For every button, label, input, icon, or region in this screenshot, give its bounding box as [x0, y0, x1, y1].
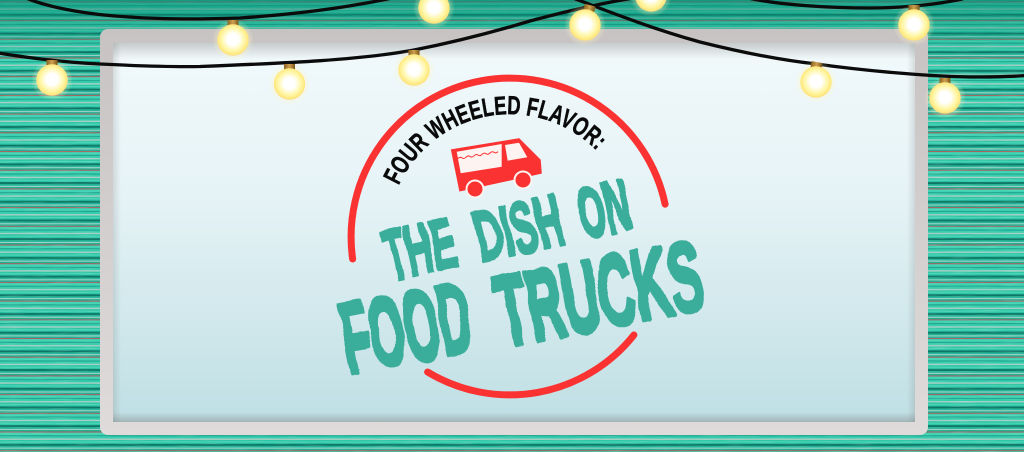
title: The Dish On: ON — [569, 165, 638, 255]
string light wires — [0, 0, 1024, 77]
ring: lower red arc — [428, 335, 634, 395]
curved subtitle: FOUR WHEELED FLAVOR: — [382, 96, 605, 185]
ring: upper red arc — [351, 78, 665, 259]
title: The Dish On: DISH — [467, 180, 570, 278]
window glass — [113, 43, 915, 422]
title: Food Trucks: FOOD — [332, 261, 481, 396]
window frame — [100, 29, 928, 435]
title: Food Trucks: TRUCKS — [487, 220, 712, 369]
icon: red food truck — [452, 139, 541, 198]
string light bulbs — [31, 0, 966, 119]
title: The Dish On: THE — [376, 203, 464, 297]
title: The Dish On — [376, 165, 638, 297]
